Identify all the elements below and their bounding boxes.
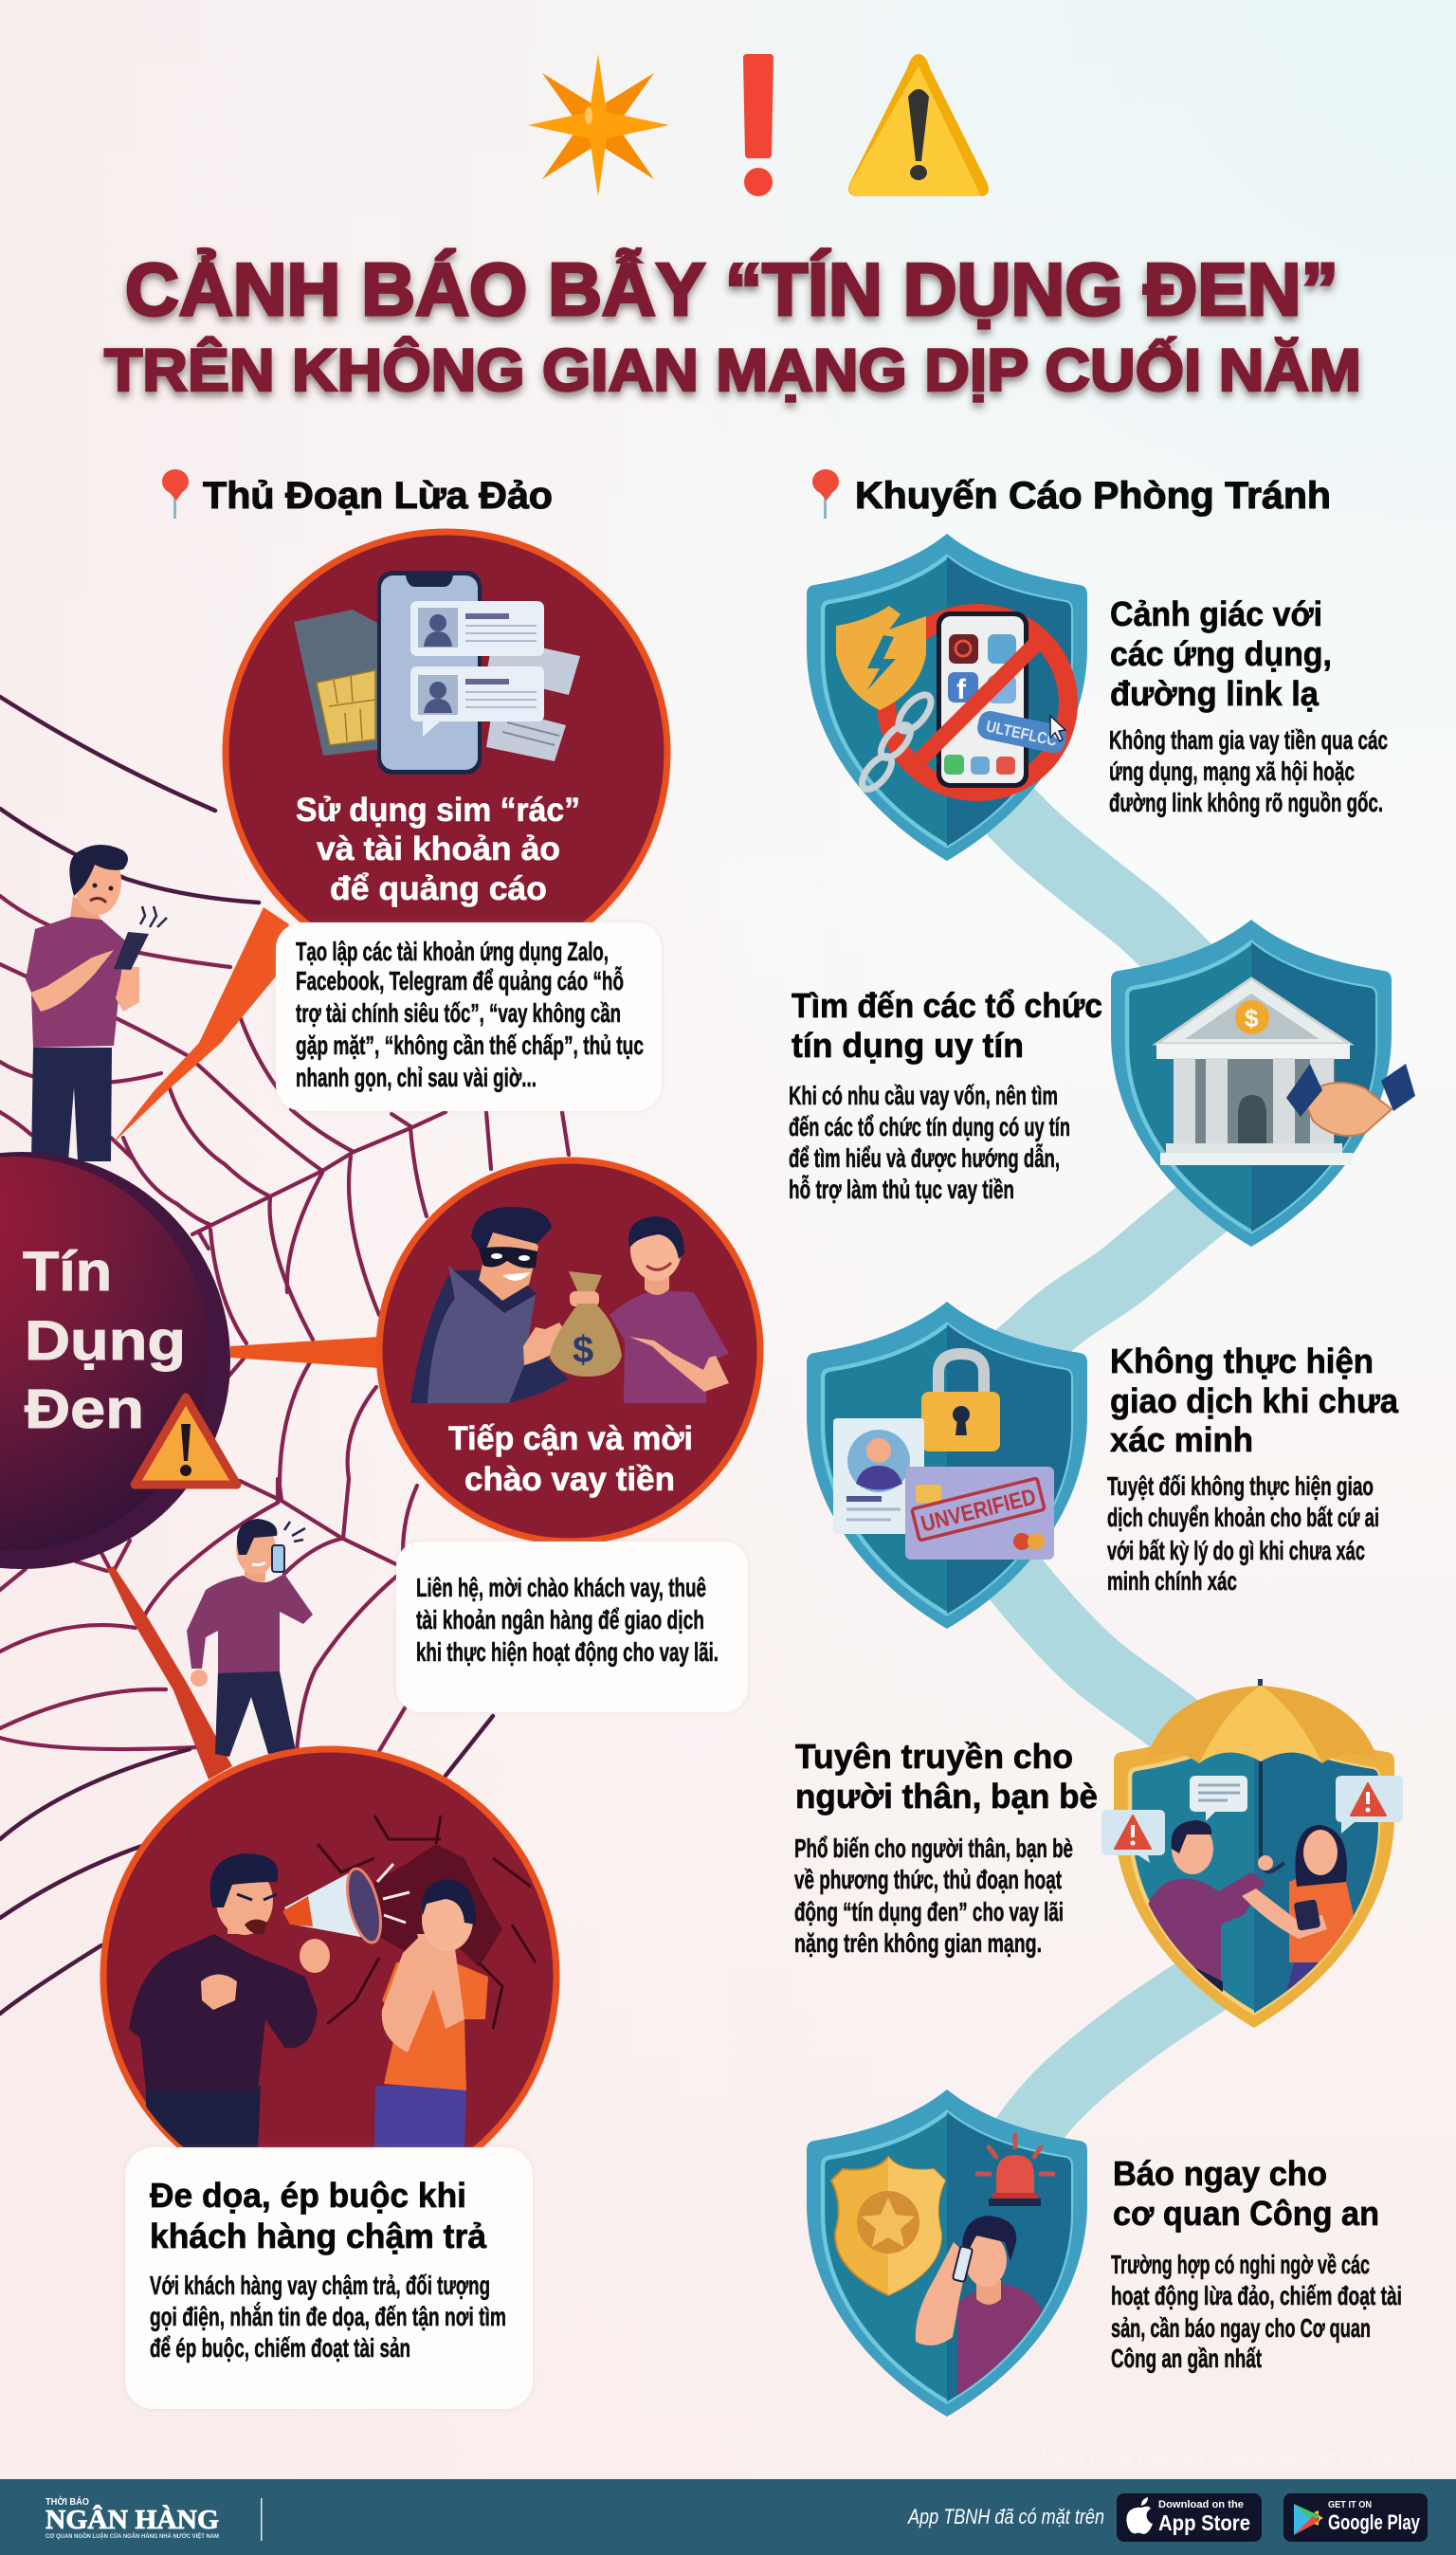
icon: umbrella: [1145, 1679, 1379, 1871]
logo: [46, 2495, 219, 2540]
icon: sim card: [294, 610, 383, 756]
icon: hub warning: [135, 1397, 237, 1485]
circle 1 heading: [296, 792, 580, 907]
google play button: [1283, 2493, 1428, 2542]
title: TRÊN KHÔNG GIAN MẠNG DỊP CUỐI NĂM: [104, 337, 1361, 404]
text: Tìm đến: để tìm hiểu và được hướng dẫn,: [789, 1143, 1060, 1173]
icon: padlock: [921, 1354, 1000, 1451]
text: Tìm đến: Khi có nhu cầu vay vốn, nên tìm: [789, 1081, 1058, 1110]
heading: Thủ Đoạn Lừa Đảo: Thủ Đoạn Lừa Đảo: [203, 475, 553, 517]
icon: link bar: ULTEFLCC: [985, 717, 1059, 750]
central hub: Tín Dụng Đen: Đen: [25, 1378, 144, 1440]
figure: man calling: [187, 1519, 313, 1757]
icon: id card: [833, 1418, 924, 1534]
callout 1: nhanh gọn, chỉ sau vài giờ...: [296, 1063, 537, 1092]
shield 4: umbrella and people: [1101, 1679, 1403, 2028]
central hub: Tín Dụng Đen: Tín: [23, 1241, 112, 1303]
icon: warning bubble right: [1336, 1776, 1403, 1834]
callout 3: [125, 2147, 533, 2409]
text: Tuyên truyền: về phương thức, thủ đoạn hoạt: [794, 1865, 1062, 1894]
icon: bank building: [1156, 978, 1353, 1165]
icon: megaphone: [282, 1864, 410, 1945]
shield 5: police: [807, 2090, 1087, 2417]
text: Báo ngay: Báo ngay cho: [1113, 2154, 1327, 2193]
icon: phone with apps: f: [956, 674, 967, 705]
footer: [0, 2479, 1456, 2555]
text: Tuyên truyền: người thân, bạn bè: [795, 1777, 1098, 1816]
icon: chain: [857, 689, 937, 794]
icon: police badge: [831, 2157, 945, 2295]
connector to circle 3: [107, 1566, 232, 1779]
icon: pin left: [162, 469, 189, 519]
central hub: Tín Dụng Đen: [0, 1152, 237, 1569]
icon: link bar: [975, 709, 1068, 756]
google play button: Google Play: [1328, 2510, 1421, 2534]
logo: CƠ QUAN NGÔN LUẬN CỦA NGÂN HÀNG NHÀ NƯỚC VIỆT NAM: [46, 2532, 219, 2540]
text: Cảnh giác: Cảnh giác với: [1110, 594, 1322, 633]
central hub: Tín Dụng Đen: Dụng: [25, 1310, 186, 1372]
icon: warning triangle: [848, 54, 989, 196]
callout 3: Với khách hàng vay chậm trả, đối tượng: [150, 2271, 490, 2300]
text: Cảnh giác: [1109, 594, 1388, 817]
callout 3: để ép buộc, chiếm đoạt tài sản: [150, 2333, 410, 2363]
icon: prohibition ring: [886, 613, 1068, 792]
icon: bank building: $: [1245, 1004, 1259, 1032]
icon: pin right: [812, 469, 839, 519]
text: Không thực hiện: [1107, 1341, 1399, 1596]
icon: profile card bottom: [410, 666, 544, 737]
text: Báo ngay: [1111, 2154, 1402, 2373]
text: Tuyên truyền: [794, 1737, 1098, 1958]
figure: scared man: [374, 1879, 488, 2152]
callout 3 heading: khách hàng chậm trả: [150, 2217, 487, 2255]
title: [104, 247, 1361, 404]
text: Không thực hiện: xác minh: [1110, 1420, 1253, 1459]
logo: NGÂN HÀNG: [46, 2506, 219, 2535]
icon: warning bubble left: [1101, 1810, 1165, 1863]
shield 1: apps and links: [807, 534, 1087, 861]
text: Tìm đến: [789, 986, 1102, 1204]
icon: message bubble: [1190, 1776, 1247, 1821]
connector to circle 1: [112, 907, 289, 1144]
text: Tuyên truyền: động “tín dụng đen” cho vay lãi: [794, 1897, 1064, 1926]
circle 3: đe dọa: [100, 1746, 559, 2147]
icon: money bag: $: [573, 1329, 593, 1371]
circle 2 heading: Tiếp cận và mời: [448, 1420, 693, 1457]
icon: cursor: [1050, 716, 1065, 741]
circle 1 heading: Sử dụng sim “rác”: [296, 792, 580, 829]
circle 1: sim rác: [226, 532, 667, 974]
icon: profile card top: [410, 601, 544, 656]
google play button: GET IT ON: [1328, 2500, 1372, 2510]
app store button: App Store: [1158, 2510, 1250, 2535]
spider web: [0, 697, 569, 2014]
heading: Khuyến Cáo Phòng Tránh: Khuyến Cáo Phòng Tránh: [855, 475, 1331, 517]
app store button: [1117, 2493, 1262, 2542]
icon: siren: [977, 2135, 1053, 2206]
callout 1: trợ tài chính siêu tốc”, “vay không cần: [296, 998, 621, 1028]
text: Không thực hiện: minh chính xác: [1107, 1566, 1237, 1596]
figure: angry man: [129, 1853, 330, 2152]
figure: thief: [410, 1207, 569, 1403]
icon: phone: [377, 571, 482, 775]
callout 1: [276, 922, 662, 1111]
icon: background cards: [486, 637, 580, 761]
callout 2: khi thực hiện hoạt động cho vay lãi.: [416, 1637, 719, 1667]
figure: man with phone: [26, 845, 167, 1161]
text: Tuyên truyền: Phổ biến cho người thân, bạn bè: [794, 1834, 1073, 1863]
callout 3 heading: Đe dọa, ép buộc khi: [150, 2176, 466, 2215]
circle 2 heading: chào vay tiền: [464, 1461, 675, 1498]
circle 1 heading: để quảng cáo: [330, 870, 547, 907]
ribbon path between shields: [995, 796, 1232, 2162]
icon: bank card unverified: [905, 1467, 1054, 1560]
shield 2: bank: [1111, 920, 1415, 1247]
circle 1 heading: và tài khoản ảo: [317, 830, 560, 867]
circle 2: tiếp cận: [379, 1160, 760, 1542]
shield 3: lock: [807, 1302, 1087, 1629]
callout 2: [396, 1542, 748, 1712]
icon: prohibition bar: [914, 639, 1041, 766]
logo: THỜI BÁO: [46, 2495, 89, 2508]
app note: App TBNH đã có mặt trên: [906, 2505, 1104, 2528]
icon: broken gold shield: [836, 606, 926, 710]
callout 3 heading: [150, 2176, 487, 2255]
figure: person on phone: [916, 2216, 1043, 2395]
connector to circle 2: [230, 1337, 379, 1368]
circle 2 heading: [448, 1420, 693, 1498]
app store button: Download on the: [1158, 2499, 1244, 2510]
text: Tìm đến: đến các tổ chức tín dụng có uy tín: [789, 1112, 1070, 1141]
callout 1: gặp mặt”, “không cần thế chấp”, thủ tục: [296, 1031, 644, 1060]
callout 1: Facebook, Telegram để quảng cáo “hỗ: [296, 966, 624, 995]
text: Tìm đến: Tìm đến các tổ chức: [792, 986, 1102, 1025]
text: Tìm đến: tín dụng uy tín: [792, 1026, 1024, 1065]
callout 3: gọi điện, nhắn tin đe dọa, đến tận nơi tìm: [150, 2302, 506, 2331]
text: Tuyên truyền: Tuyên truyền cho: [795, 1737, 1073, 1776]
wall cracks: [318, 1816, 536, 2029]
icon: handshake: [1286, 1064, 1415, 1136]
figures: man and woman: [1149, 1820, 1354, 1993]
text: Cảnh giác: đường link lạ: [1110, 674, 1320, 713]
icon: orange star: [528, 54, 669, 196]
icon: money bag: [550, 1271, 622, 1377]
text: Không thực hiện: giao dịch khi chưa: [1110, 1381, 1399, 1420]
title: CẢNH BÁO BẪY “TÍN DỤNG ĐEN”: [125, 247, 1338, 331]
icon: red exclamation mark: [743, 54, 774, 196]
callout 2: Liên hệ, mời chào khách vay, thuê: [416, 1573, 706, 1602]
figure: man in purple: [610, 1216, 729, 1403]
text: Tìm đến: hỗ trợ làm thủ tục vay tiền: [789, 1175, 1014, 1204]
figure: woman: [1242, 1825, 1354, 1991]
text: Không thực hiện: Không thực hiện: [1110, 1341, 1374, 1380]
text: Tuyên truyền: nặng trên không gian mạng.: [794, 1928, 1042, 1958]
callout 2: tài khoản ngân hàng để giao dịch: [416, 1605, 704, 1634]
text: Báo ngay: cơ quan Công an: [1113, 2194, 1379, 2233]
text: Cảnh giác: các ứng dụng,: [1110, 634, 1332, 673]
figure: man: [1149, 1820, 1273, 1993]
icon: phone with apps: [937, 611, 1028, 788]
icon: bank card unverified: UNVERIFIED: [919, 1484, 1039, 1538]
text: Báo ngay: Công an gần nhất: [1111, 2344, 1262, 2373]
callout 1: Tạo lập các tài khoản ứng dụng Zalo,: [296, 937, 609, 966]
